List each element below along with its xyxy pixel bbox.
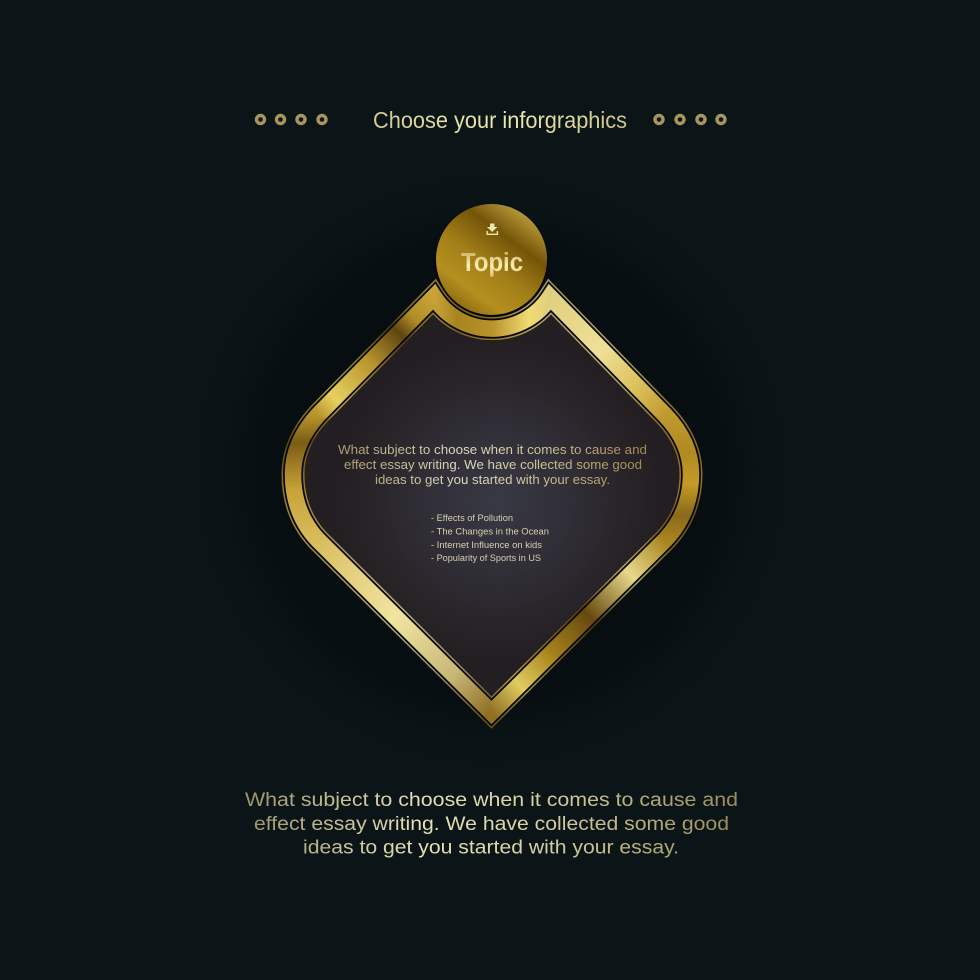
panel paragraph: effect essay writing. We have collected some good bbox=[344, 458, 642, 472]
frame: outer rim bbox=[282, 278, 702, 729]
panel paragraph: ideas to get you started with your essay. bbox=[375, 473, 610, 487]
frame: black keylines bbox=[293, 297, 691, 712]
bottom paragraph: What subject to choose when it comes to cause and bbox=[245, 789, 738, 811]
panel list: - Effects of Pollution bbox=[431, 513, 513, 523]
panel: gold framed rounded diamond bbox=[282, 278, 702, 729]
infographic canvas bbox=[245, 111, 737, 858]
panel list: - Popularity of Sports in US bbox=[431, 553, 541, 563]
topic label: Topic bbox=[461, 249, 523, 277]
panel list bbox=[431, 513, 549, 563]
dots: right bbox=[655, 116, 725, 124]
topic badge bbox=[434, 204, 548, 316]
title: Choose your inforgraphics bbox=[373, 107, 627, 133]
bottom paragraph: ideas to get you started with your essay. bbox=[303, 836, 679, 858]
header row bbox=[256, 107, 725, 133]
frame: main gold band bbox=[284, 284, 700, 724]
panel paragraph bbox=[338, 443, 647, 487]
dots: left bbox=[256, 116, 326, 124]
panel paragraph: What subject to choose when it comes to cause and bbox=[338, 443, 647, 457]
bottom paragraph: effect essay writing. We have collected some good bbox=[254, 813, 729, 835]
panel fill bbox=[293, 297, 691, 712]
panel list: - Internet Influence on kids bbox=[431, 540, 543, 550]
bottom paragraph bbox=[245, 789, 738, 858]
icon: download bbox=[486, 224, 498, 235]
panel list: - The Changes in the Ocean bbox=[431, 526, 549, 536]
